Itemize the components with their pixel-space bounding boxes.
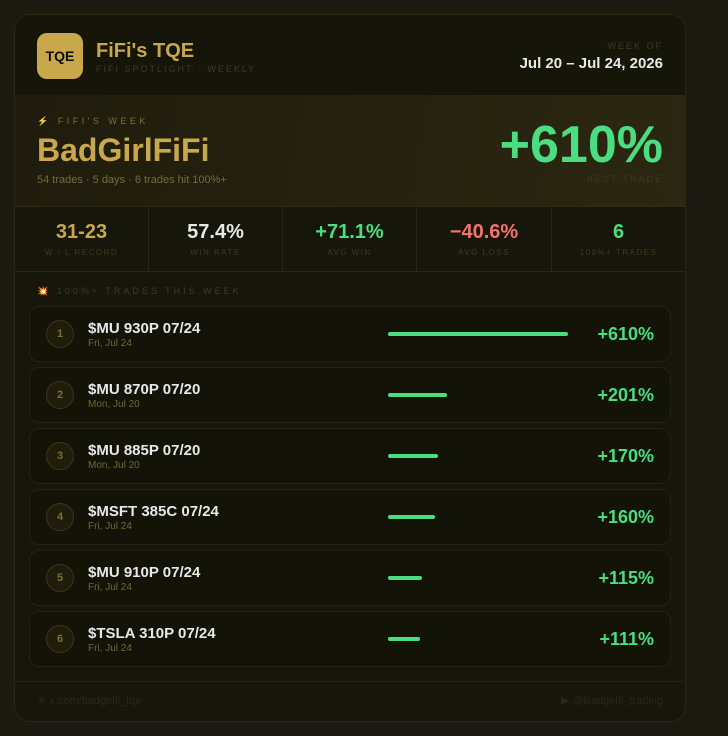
trade row 4: Fri, Jul 24 bbox=[88, 521, 132, 532]
trade row 2 bbox=[29, 367, 671, 423]
stat: avg loss: −40.6% bbox=[450, 221, 518, 243]
trade row 1: +610% bbox=[597, 324, 654, 344]
stat: 100%+ trades: 6 bbox=[613, 221, 624, 243]
week dates: Jul 20 – Jul 24, 2026 bbox=[520, 55, 663, 72]
footer bbox=[15, 681, 685, 721]
trade row 5: 5 bbox=[57, 572, 63, 584]
trade row 2: Mon, Jul 20 bbox=[88, 399, 140, 410]
trade row 3: +170% bbox=[597, 446, 654, 466]
section heading: 💥 100%+ TRADES THIS WEEK bbox=[37, 286, 242, 296]
footer left link: ✕ x.com/badgirlfi_tqe bbox=[37, 695, 142, 707]
stat: win rate: WIN RATE bbox=[190, 248, 241, 257]
trade row 6: $TSLA 310P 07/24 bbox=[88, 625, 216, 642]
trade row 3: Mon, Jul 20 bbox=[88, 460, 140, 471]
trade row 4: $MSFT 385C 07/24 bbox=[88, 503, 219, 520]
trade row 6: 6 bbox=[57, 633, 63, 645]
trade row 2: $MU 870P 07/20 bbox=[88, 381, 200, 398]
week label: WEEK OF bbox=[607, 41, 663, 51]
trade row 4 bbox=[29, 489, 671, 545]
trade row 5: $MU 910P 07/24 bbox=[88, 564, 200, 581]
stat: 100%+ trades bbox=[580, 221, 657, 257]
trade row 5: Fri, Jul 24 bbox=[88, 582, 132, 593]
hero summary: 54 trades · 5 days · 6 trades hit 100%+ bbox=[37, 174, 227, 186]
trade row 3: $MU 885P 07/20 bbox=[88, 442, 200, 459]
trade row 5: +115% bbox=[598, 568, 654, 588]
logo badge bbox=[37, 33, 83, 79]
footer right handle: ▶ @Badgirlfi_trading bbox=[561, 695, 663, 707]
trade row 3 bbox=[29, 428, 671, 484]
stat: record: 31-23 bbox=[56, 221, 107, 243]
best trade label: BEST TRADE bbox=[587, 174, 663, 184]
trade row 5 bbox=[29, 550, 671, 606]
logo badge: TQE bbox=[46, 48, 74, 64]
trade row 6: Fri, Jul 24 bbox=[88, 643, 132, 654]
trade row 6 bbox=[29, 611, 671, 667]
header bbox=[15, 15, 685, 95]
trade row 1: 1 bbox=[57, 328, 63, 340]
best trade value: +610% bbox=[500, 116, 663, 174]
stat: avg win: +71.1% bbox=[315, 221, 384, 243]
stat: win rate bbox=[149, 207, 283, 272]
trader name: BadGirlFiFi bbox=[37, 132, 209, 168]
stat: avg win bbox=[283, 207, 417, 272]
trade row 4: 4 bbox=[57, 511, 63, 523]
stat: avg loss: AVG LOSS bbox=[458, 248, 510, 257]
trade row 1: Fri, Jul 24 bbox=[88, 338, 132, 349]
stat: record bbox=[15, 207, 149, 272]
stat: avg loss bbox=[417, 207, 552, 272]
stat: avg win: AVG WIN bbox=[327, 248, 372, 257]
hero panel bbox=[15, 95, 685, 207]
trade row 6: +111% bbox=[599, 629, 654, 649]
brand subtitle: FIFI SPOTLIGHT · WEEKLY bbox=[96, 64, 256, 74]
stat: record: W / L RECORD bbox=[45, 248, 118, 257]
brand title: FiFi's TQE bbox=[96, 40, 194, 62]
stat: 100%+ trades: 100%+ TRADES bbox=[580, 248, 657, 257]
stats row bbox=[15, 207, 685, 272]
trade row 1: $MU 930P 07/24 bbox=[88, 320, 200, 337]
stat: win rate: 57.4% bbox=[187, 221, 244, 243]
trade row 2: 2 bbox=[57, 389, 63, 401]
hero eyebrow: ⚡ FIFI'S WEEK bbox=[37, 116, 149, 126]
trade row 4: +160% bbox=[597, 507, 654, 527]
trade row 3: 3 bbox=[57, 450, 63, 462]
trade row 2: +201% bbox=[597, 385, 654, 405]
trade row 1 bbox=[29, 306, 671, 362]
